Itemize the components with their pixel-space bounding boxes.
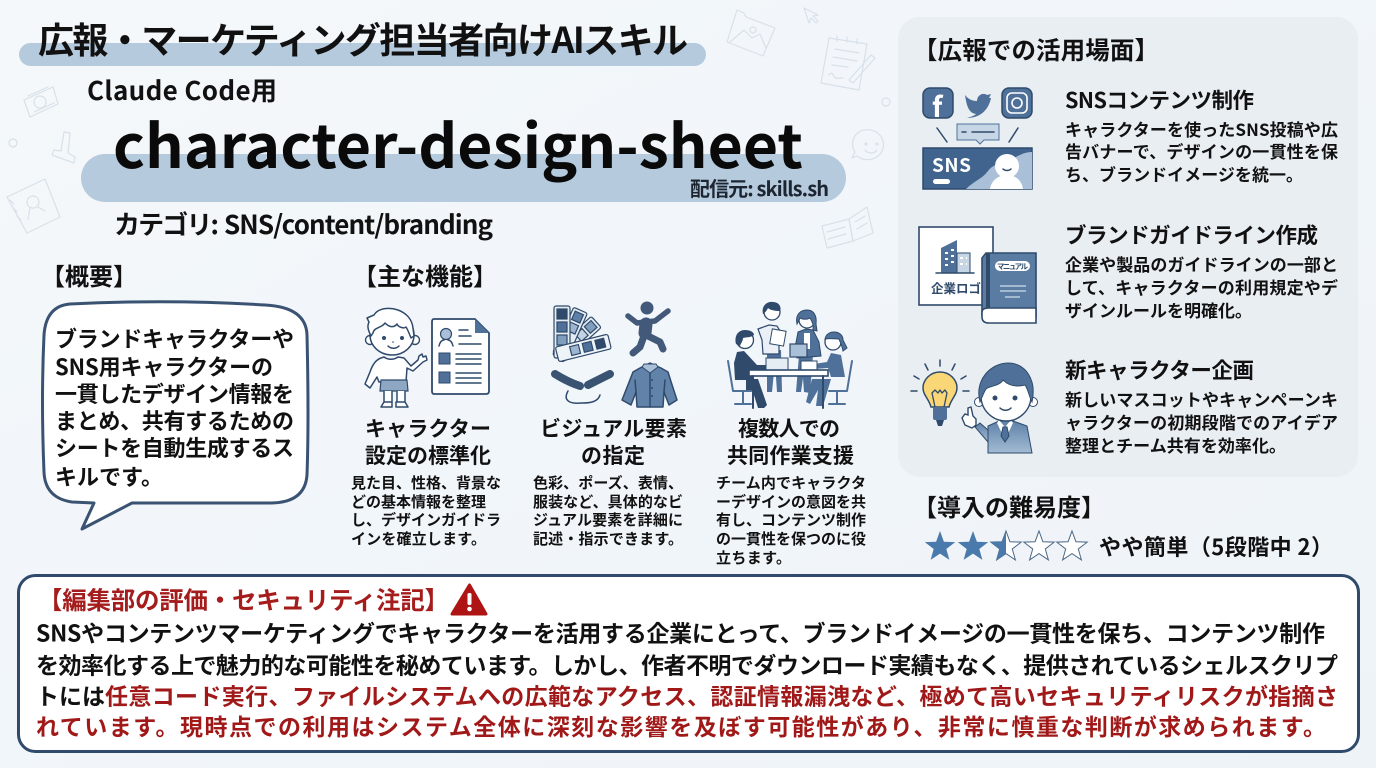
feature description — [716, 472, 866, 568]
decorative background icons — [7, 8, 890, 248]
feature description: 色彩、ポーズ、表情、 — [533, 472, 683, 493]
icon: posing figure — [628, 302, 668, 353]
seated woman — [814, 353, 845, 377]
skill name: character-design-sheet — [113, 99, 803, 186]
use case 1: キャラクターを使ったSNS投稿や広 — [1065, 116, 1338, 141]
feature 1: standardisation — [351, 308, 501, 549]
category: カテゴリ: — [114, 205, 219, 242]
use case 1: ち、ブランドイメージを統一。 — [1065, 161, 1303, 186]
overview text: ブランドキャラクターや — [55, 322, 294, 354]
use case 3: ャラクターの初期段階でのアイデア — [1065, 409, 1338, 434]
feature description: ジュアル要素を詳細に — [533, 509, 683, 530]
icon: company logo and manual: マニュアル — [997, 261, 1028, 272]
feature description: どの基本情報を整理 — [351, 491, 486, 512]
note body: SNSやコンテンツマーケティングでキャラクターを活用する企業にとって、ブランドイメージの一貫性を保ち、コンテンツ制作 — [36, 614, 1325, 648]
skill name banner — [81, 99, 846, 202]
feature description — [533, 472, 683, 549]
table and devices — [766, 358, 788, 370]
standing woman — [796, 355, 813, 393]
panel heading: 【広報での活用場面】 — [913, 32, 1159, 67]
feature heading: ビジュアル要素 — [540, 413, 687, 443]
category: SNS/content/branding — [224, 205, 493, 242]
feature heading: の指定 — [581, 440, 645, 470]
use case 2: 企業や製品のガイドラインの一部と — [1065, 251, 1338, 276]
feature heading — [365, 413, 491, 470]
feature 2: visual elements — [533, 302, 687, 549]
icon: team at table — [728, 302, 852, 408]
feature heading — [727, 413, 854, 470]
use case 2: して、キャラクターの利用規定やデ — [1065, 274, 1338, 299]
feature heading: 複数人での — [738, 413, 840, 443]
use case 3: 整理とチーム共有を効率化。 — [1065, 432, 1286, 457]
feature description: し、デザインガイドラ — [351, 509, 501, 530]
overview text: シートを自動生成するス — [55, 431, 294, 463]
feature heading: 共同作業支援 — [727, 440, 854, 470]
feature 3: collaboration — [716, 302, 866, 568]
star rating — [925, 531, 1087, 560]
use case 1 — [1065, 84, 1338, 186]
feature heading: キャラクター — [365, 413, 491, 443]
panel: editorial evaluation and security note — [18, 576, 1358, 752]
icon: SNS content — [923, 86, 1032, 189]
icon: company logo and manual: 企業ロゴ — [931, 278, 981, 297]
standing man — [767, 350, 782, 392]
note body: を効率化する上で魅力的な可能性を秘めています。しかし、作者不明でダウンロード実績もなく、提供されているシェルスクリプ — [36, 646, 1338, 680]
feature description: 有し、コンテンツ制作 — [716, 509, 866, 530]
use case 3: 新しいマスコットやキャンペーンキ — [1065, 386, 1338, 411]
title — [19, 12, 706, 66]
feature description: チーム内でキャラクタ — [716, 472, 866, 493]
source: 配信元: skills.sh — [690, 173, 829, 202]
note body: れています。現時点での利用はシステム全体に深刻な影響を及ぼす可能性があり、非常に慎重な判断が求められます。 — [36, 708, 1326, 742]
use case 1: SNSコンテンツ制作 — [1065, 84, 1254, 115]
banner bar — [81, 154, 846, 202]
overview text: キルです。 — [55, 460, 163, 492]
use case 1: 告バナーで、デザインの一貫性を保 — [1065, 138, 1338, 163]
panel background — [898, 17, 1358, 477]
feature heading — [540, 413, 687, 470]
feature description: の一貫性を保つのに役 — [716, 528, 866, 549]
note body: 任意コード実行、ファイルシステムへの広範なアクセス、認証情報漏洩など、極めて高いセキュリティリスクが指摘さ — [105, 678, 1338, 712]
feature heading: 設定の標準化 — [365, 440, 491, 470]
title highlight bar — [19, 43, 706, 66]
feature description: 記述・指示できます。 — [533, 528, 683, 549]
overview text: 一貫したデザイン情報を — [55, 377, 294, 409]
difficulty label: やや簡単（5段階中 2） — [1099, 530, 1333, 562]
overview text: まとめ、共有するための — [55, 404, 294, 436]
overview text — [55, 322, 294, 492]
icon: company logo and manual — [919, 227, 1036, 323]
panel: overview speech bubble — [42, 302, 308, 529]
use case 2 — [1065, 219, 1338, 322]
heading: main features: 【主な機能】 — [353, 257, 497, 292]
icon: warning triangle — [452, 585, 486, 614]
use case 2: ブランドガイドライン作成 — [1065, 219, 1318, 250]
panel: PR use cases — [898, 17, 1358, 477]
use case 3 — [1065, 354, 1338, 457]
note body — [36, 614, 1338, 742]
use case 3: 新キャラクター企画 — [1065, 354, 1254, 385]
note box — [18, 576, 1358, 752]
overview text: SNS用キャラクターの — [55, 350, 273, 382]
icon: shirt — [622, 363, 677, 407]
icon: idea bulb and person — [911, 360, 1038, 453]
icon: child character — [365, 308, 427, 407]
icon: SNS content: f — [932, 86, 944, 126]
feature description — [351, 472, 501, 549]
icon: SNS content: SNS — [932, 151, 971, 178]
subtitle: Claude Code用 — [87, 71, 277, 108]
icon: hands and expression — [555, 374, 610, 403]
feature description: 見た目、性格、背景な — [351, 472, 501, 493]
note body: トには — [36, 678, 105, 712]
seated man — [734, 351, 769, 380]
title text: 広報・マーケティング担当者向けAIスキル — [38, 12, 688, 64]
feature description: インを確立します。 — [351, 528, 486, 549]
icon: profile document — [432, 319, 489, 394]
feature description: 立ちます。 — [716, 547, 791, 568]
heading: overview: 【概要】 — [41, 257, 137, 292]
icon: colour swatches — [553, 306, 611, 362]
feature description: ーデザインの意図を共 — [716, 491, 866, 512]
use case 2: ザインルールを明確化。 — [1065, 297, 1252, 322]
bubble shape — [42, 302, 308, 529]
note heading: 【編集部の評価・セキュリティ注記】 — [38, 582, 449, 617]
heading: difficulty: 【導入の難易度】 — [913, 488, 1105, 523]
feature description: 服装など、具体的なビ — [533, 491, 683, 512]
